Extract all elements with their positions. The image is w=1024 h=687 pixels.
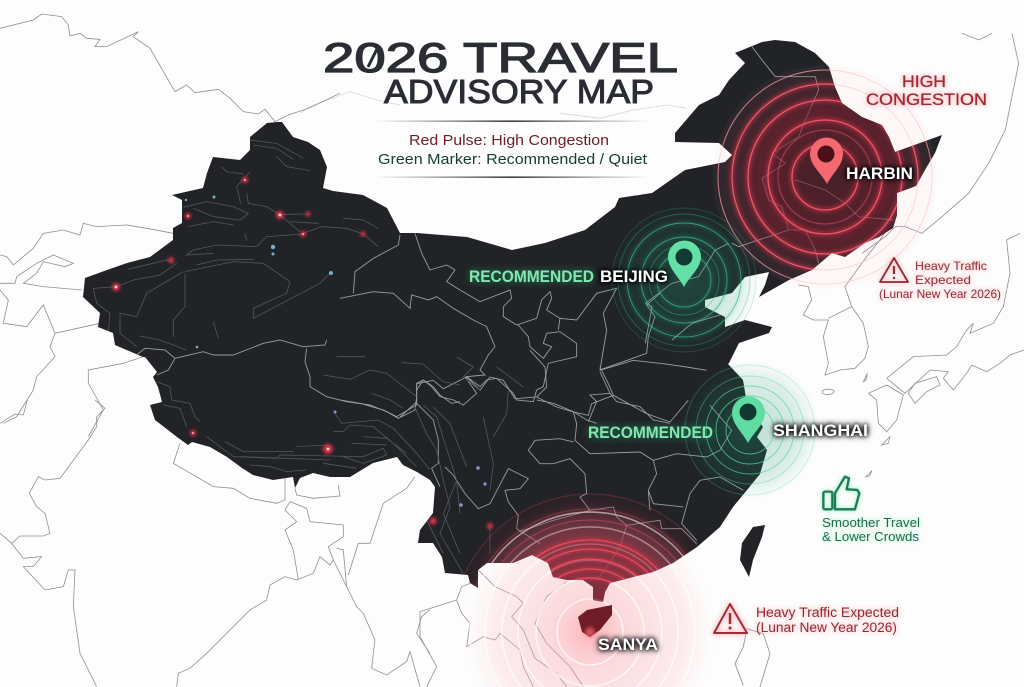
status label: Shanghai recommended: RECOMMENDED [588, 424, 713, 442]
title: ADVISORY MAP [384, 73, 654, 110]
pin: Shanghai [732, 396, 765, 443]
callout: Harbin heavy traffic [879, 258, 1001, 301]
label: high congestion [866, 72, 987, 109]
callout: Sanya heavy traffic: Heavy Traffic Expected [756, 605, 899, 620]
pin: Beijing [668, 240, 701, 287]
pulse: Sanya [464, 494, 700, 687]
city label: Harbin: HARBIN [846, 165, 913, 183]
callout: Sanya heavy traffic: (Lunar New Year 2026) [756, 620, 897, 635]
island: Hainan [578, 605, 612, 637]
map: China silhouette [83, 40, 942, 602]
legend: Green Marker: Recommended / Quiet [378, 152, 647, 168]
callout: Harbin heavy traffic: Expected [915, 273, 971, 287]
callout: Harbin heavy traffic: (Lunar New Year 2026) [879, 287, 1001, 301]
island: Taiwan [740, 525, 765, 577]
icon: thumbs up [823, 477, 859, 509]
title [323, 34, 678, 110]
callout: Harbin heavy traffic: Heavy Traffic [915, 259, 987, 273]
pulse: Shanghai [680, 360, 820, 500]
callout: smoother travel [822, 477, 920, 544]
city label: Sanya: SANYA [598, 636, 658, 654]
label: high congestion: CONGESTION [866, 90, 987, 109]
glowing data dots [112, 177, 493, 529]
pin: Harbin [810, 138, 843, 184]
callout: smoother travel: & Lower Crowds [822, 530, 919, 544]
city label: Beijing: BEIJING [600, 268, 668, 286]
pulse: Harbin [713, 65, 937, 289]
legend [375, 120, 650, 178]
callout: smoother travel: Smoother Travel [822, 516, 920, 530]
callout: Sanya heavy traffic [714, 604, 899, 635]
legend: Red Pulse: High Congestion [409, 133, 609, 149]
label: high congestion: HIGH [902, 72, 946, 91]
river lines and data traces [93, 140, 523, 574]
icon: warning triangle [880, 258, 908, 282]
status label: Beijing recommended: RECOMMENDED [469, 268, 594, 286]
icon: warning triangle [714, 604, 747, 633]
pulse: Beijing [610, 206, 758, 354]
city label: Shanghai: SHANGHAI [773, 422, 868, 440]
province borders [130, 47, 894, 580]
title: 2026 TRAVEL [323, 34, 678, 81]
